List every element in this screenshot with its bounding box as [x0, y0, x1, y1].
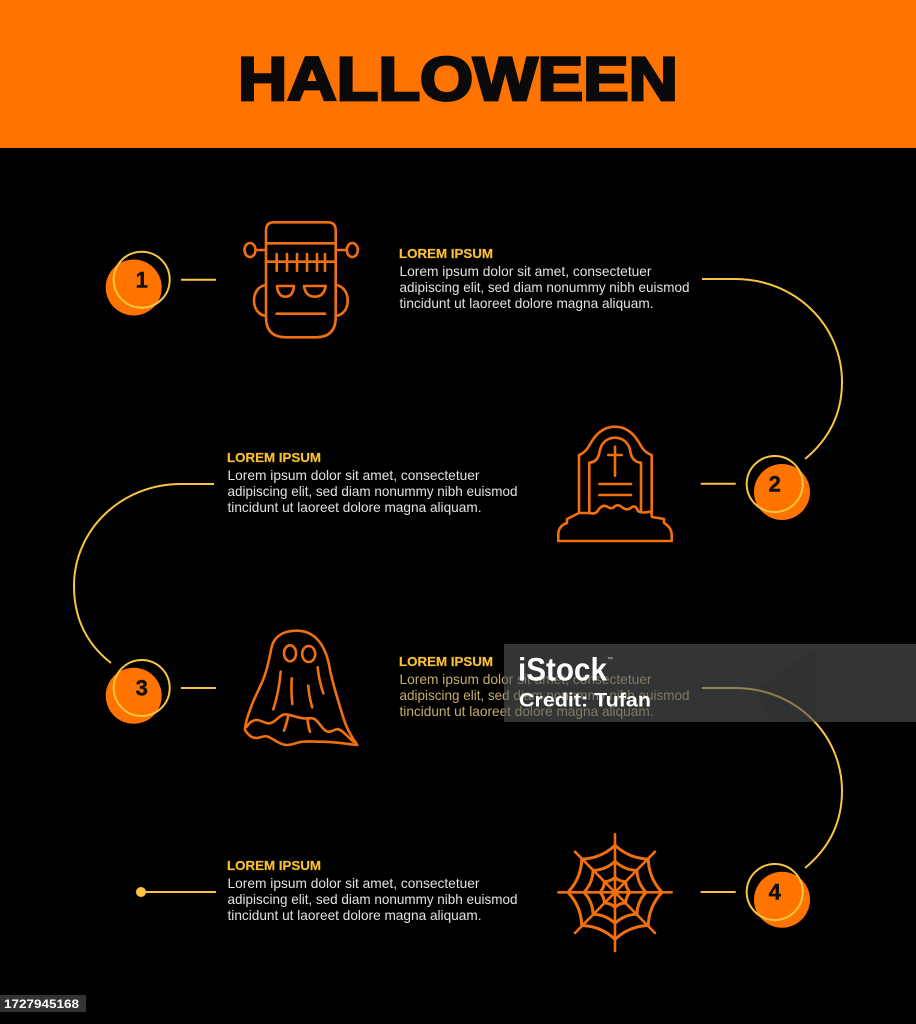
arrow: curve from step 3 to step 4 — [702, 688, 842, 868]
watermark: iStock credit: Credit: Tufan — [519, 690, 651, 712]
step 2 connector — [701, 483, 736, 485]
text block 2 — [227, 450, 518, 515]
body 1 — [400, 264, 690, 311]
body 4: adipiscing elit, sed diam nonummy nibh euismod — [228, 892, 518, 907]
body 3: adipiscing elit, sed diam nonummy nibh euismod — [400, 688, 690, 703]
image id tag — [0, 995, 86, 1012]
heading 1: LOREM IPSUM — [399, 246, 493, 261]
image id tag: 1727945168 — [4, 997, 79, 1011]
icon: gravestone — [558, 427, 672, 541]
text block 4 — [227, 858, 518, 923]
body 2: tincidunt ut laoreet dolore magna aliquam. — [228, 500, 482, 515]
step 1 badge — [106, 252, 170, 316]
body 2: adipiscing elit, sed diam nonummy nibh euismod — [228, 484, 518, 499]
end marker line — [136, 887, 216, 897]
body 3 — [400, 672, 690, 719]
step 3 connector — [181, 687, 216, 689]
icon: spider web — [558, 834, 672, 951]
heading 4: LOREM IPSUM — [227, 858, 321, 873]
icon: ghost — [245, 631, 357, 745]
step 1 badge: 1 — [136, 268, 148, 292]
watermark: iStock credit — [504, 644, 916, 722]
header banner — [0, 0, 916, 148]
step 3 badge — [106, 660, 170, 724]
step 1 connector — [181, 279, 216, 281]
step 4 badge: 4 — [769, 880, 782, 904]
step 3 badge: 3 — [136, 676, 148, 700]
step 4 badge — [747, 864, 810, 928]
body 1: adipiscing elit, sed diam nonummy nibh euismod — [400, 280, 690, 295]
step 2 badge — [747, 456, 810, 520]
step 4 connector — [701, 891, 736, 893]
text block 3 — [399, 654, 690, 719]
body 4: tincidunt ut laoreet dolore magna aliquam. — [228, 908, 482, 923]
body 4 — [228, 876, 518, 923]
body 1: tincidunt ut laoreet dolore magna aliquam. — [400, 296, 654, 311]
body 2: Lorem ipsum dolor sit amet, consectetuer — [228, 468, 480, 483]
body 2 — [228, 468, 518, 515]
body 4: Lorem ipsum dolor sit amet, consectetuer — [228, 876, 480, 891]
watermark: iStock credit: ™ — [607, 656, 613, 663]
text block 1 — [399, 246, 690, 311]
step 2 badge: 2 — [769, 472, 781, 496]
heading 2: LOREM IPSUM — [227, 450, 321, 465]
title: HALLOWEEN — [238, 45, 678, 113]
body 3: Lorem ipsum dolor sit amet, consectetuer — [400, 672, 652, 687]
body 3: tincidunt ut laoreet dolore magna aliquam. — [400, 704, 654, 719]
arrow: curve from step 1 to step 2 — [702, 279, 842, 459]
arrow: curve from step 2 to step 3 — [74, 484, 214, 663]
icon: frankenstein monster — [244, 222, 358, 337]
heading 3: LOREM IPSUM — [399, 654, 493, 669]
body 1: Lorem ipsum dolor sit amet, consectetuer — [400, 264, 652, 279]
watermark: iStock credit: iStock — [518, 652, 607, 688]
